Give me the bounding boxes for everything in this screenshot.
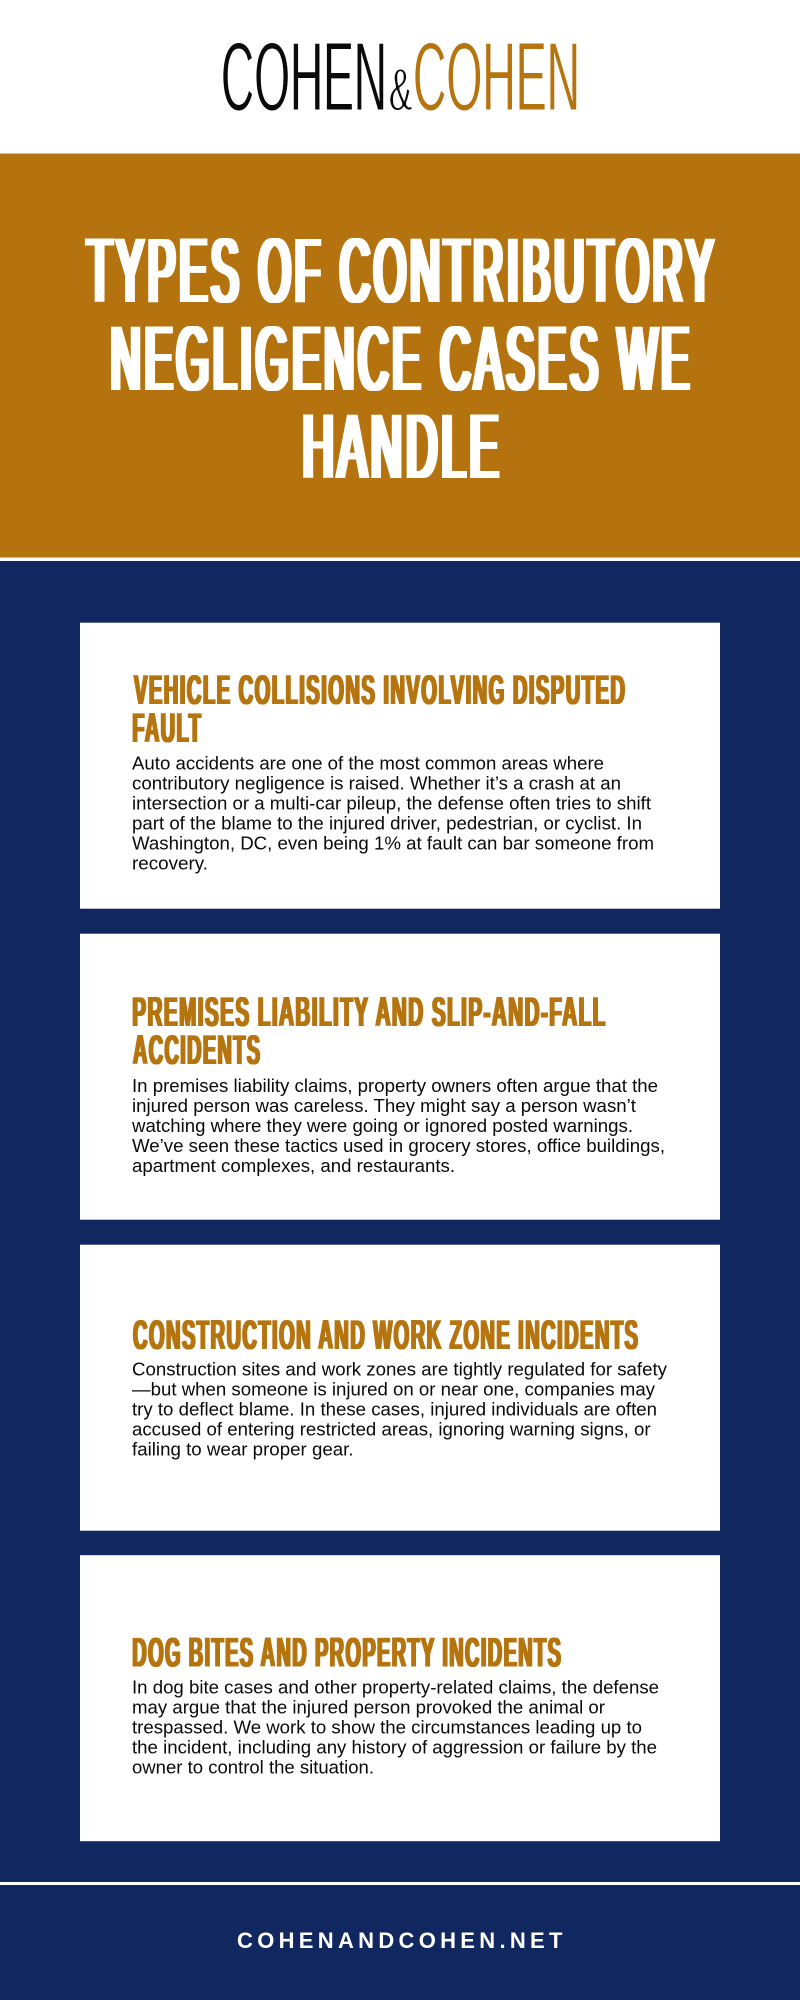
text block: vehicle collisions: Washington, DC, even being 1% at fault can bar someone from xyxy=(132,832,654,854)
text block: vehicle collisions: part of the blame to the injured driver, pedestrian, or cyclist. In xyxy=(132,812,642,834)
panel: construction card xyxy=(80,1245,720,1531)
panel: premises liability card xyxy=(80,934,720,1220)
panel: navy content background xyxy=(0,561,800,2000)
panel: dog bites card xyxy=(80,1555,720,1841)
text block: vehicle collisions: Auto accidents are one of the most common areas where xyxy=(132,752,604,774)
footer: website: COHENANDCOHEN.NET xyxy=(237,1928,567,1953)
text block: dog bites: In dog bite cases and other property-related claims, the defense xyxy=(132,1676,659,1697)
panel: vehicle collisions card xyxy=(80,623,720,909)
text: COHEN xyxy=(413,22,580,132)
text block: vehicle collisions: contributory negligence is raised. Whether it’s a crash at an xyxy=(132,772,621,794)
text block: premises liability: injured person was careless. They might say a person wasn’t xyxy=(132,1095,637,1116)
text block: vehicle collisions: intersection or a multi-car pileup, the defense often tries to shift xyxy=(132,792,652,814)
text block: premises liability xyxy=(131,1075,665,1176)
text block: dog bites: may argue that the injured person provoked the animal or xyxy=(132,1696,605,1717)
heading: premises liability: ACCIDENTS xyxy=(133,1026,261,1073)
title xyxy=(87,220,718,498)
panel: title banner xyxy=(0,154,800,558)
text block: construction xyxy=(132,1358,668,1459)
text block: construction: accused of entering restricted areas, ignoring warning signs, or xyxy=(132,1418,651,1439)
title: HANDLE xyxy=(303,396,503,498)
text block: construction: Construction sites and work zones are tightly regulated for safety xyxy=(132,1358,668,1379)
heading: vehicle collisions xyxy=(132,666,626,751)
logo: Cohen & Cohen: & xyxy=(389,56,412,124)
text block: dog bites: the incident, including any history of aggression or failure by the xyxy=(132,1736,657,1757)
text block: construction: —but when someone is injured on or near one, companies may xyxy=(132,1378,656,1399)
text block: dog bites: owner to control the situation. xyxy=(132,1756,374,1777)
text block: dog bites xyxy=(132,1676,659,1777)
heading: premises liability xyxy=(132,988,607,1073)
text block: premises liability: watching where they were going or ignored posted warnings. xyxy=(131,1115,633,1136)
text block: premises liability: In premises liability claims, property owners often argue that the xyxy=(132,1075,658,1096)
text block: dog bites: trespassed. We work to show the circumstances leading up to xyxy=(132,1716,642,1737)
logo: Cohen & Cohen: COHEN xyxy=(221,22,387,132)
text block: premises liability: We’ve seen these tactics used in grocery stores, office buildings, xyxy=(132,1135,665,1156)
text block: premises liability: apartment complexes, and restaurants. xyxy=(132,1155,455,1176)
text block: vehicle collisions xyxy=(132,752,654,874)
heading: vehicle collisions: FAULT xyxy=(132,704,202,751)
text block: construction: failing to wear proper gear. xyxy=(132,1438,354,1459)
text block: vehicle collisions: recovery. xyxy=(132,852,208,874)
text block: construction: try to deflect blame. In these cases, injured individuals are often xyxy=(132,1398,657,1419)
